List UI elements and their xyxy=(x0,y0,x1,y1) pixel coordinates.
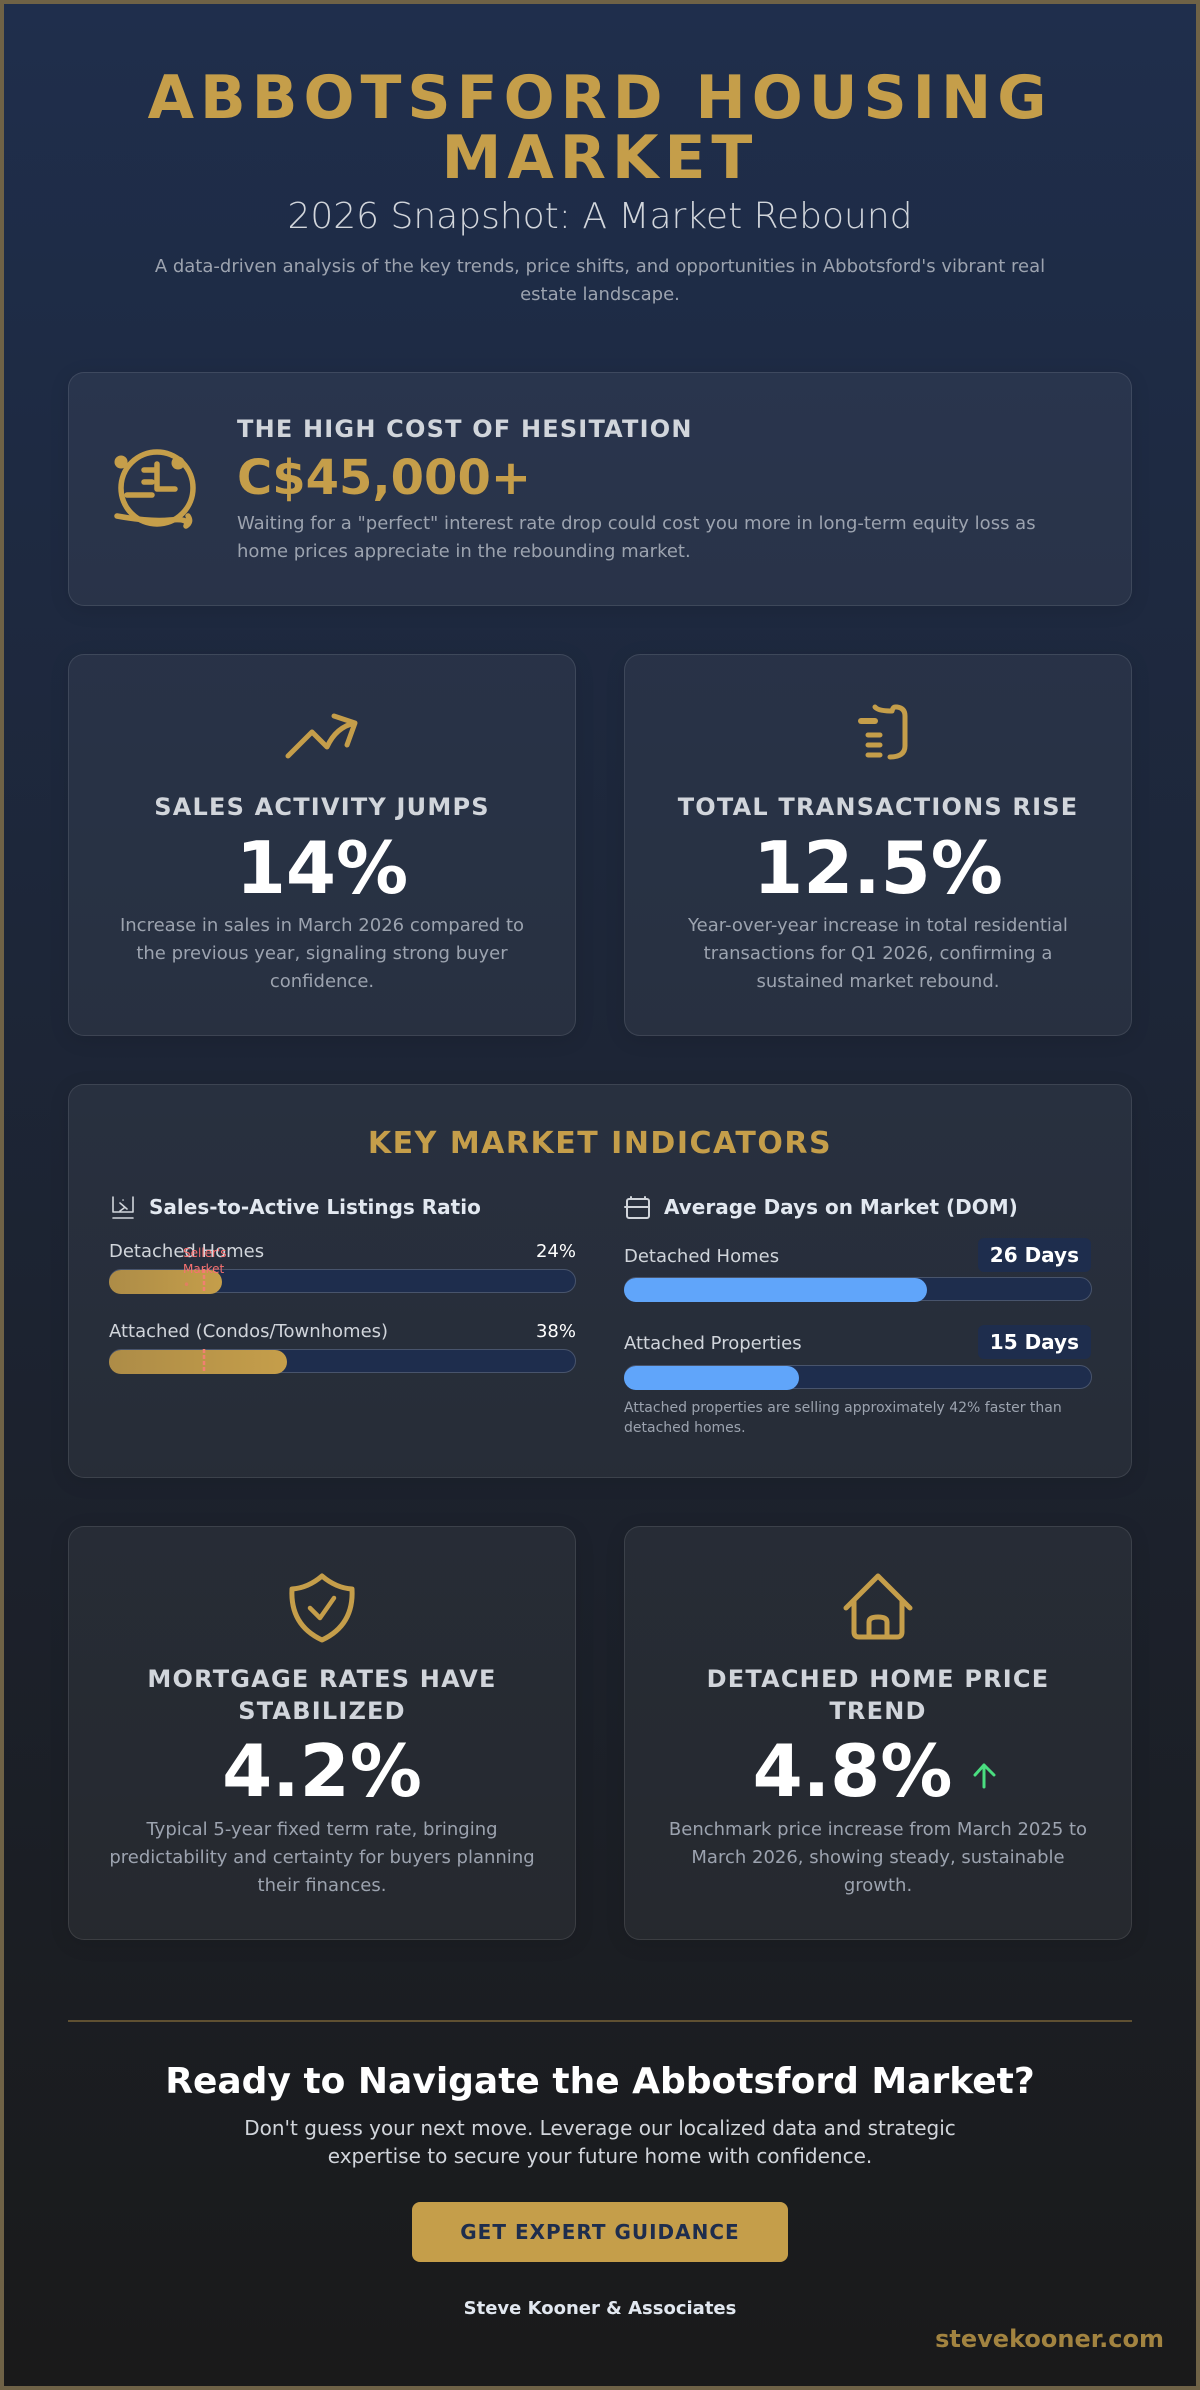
footnote: detached homes. xyxy=(624,1420,746,1436)
panel: key market indicators xyxy=(68,1084,1132,1478)
row: detached homes xyxy=(109,1241,576,1294)
description xyxy=(120,915,524,992)
chart: sales-to-active listings ratio xyxy=(109,1195,576,1374)
cta button xyxy=(412,2202,788,2262)
panel title: KEY MARKET INDICATORS xyxy=(368,1126,832,1161)
card title: TREND xyxy=(829,1697,927,1725)
icon: chart xyxy=(113,1197,133,1218)
hero label: THE HIGH COST OF HESITATION xyxy=(237,415,693,443)
description xyxy=(669,1819,1087,1896)
company name: Steve Kooner & Associates xyxy=(464,2298,736,2319)
icon: trend arrow xyxy=(288,716,355,756)
description: transactions for Q1 2026, confirming a xyxy=(704,943,1052,964)
marker label: • xyxy=(183,1278,190,1292)
hero description xyxy=(237,513,1036,562)
card title: SALES ACTIVITY JUMPS xyxy=(154,793,490,821)
panel: mortgage rates xyxy=(68,1526,576,1940)
icon: shield xyxy=(292,1576,352,1640)
intro text xyxy=(155,256,1045,305)
marker label xyxy=(183,1246,227,1292)
icon: clipboard xyxy=(861,707,905,757)
row: detached days xyxy=(624,1238,1092,1302)
card title: TOTAL TRANSACTIONS RISE xyxy=(678,793,1078,821)
card title: STABILIZED xyxy=(238,1697,406,1725)
marker label: Market xyxy=(183,1262,225,1276)
row: detached days: 26 Days xyxy=(990,1243,1079,1267)
row: attached homes xyxy=(109,1321,576,1374)
description: Increase in sales in March 2026 compared to xyxy=(120,915,524,936)
icon: house xyxy=(846,1576,910,1637)
hero value: C$45,000+ xyxy=(237,450,531,506)
panel: total transactions xyxy=(624,654,1132,1036)
chart: average days on market xyxy=(624,1195,1092,1436)
description: March 2026, showing steady, sustainable xyxy=(691,1847,1065,1868)
row: detached homes: Detached Homes xyxy=(109,1241,264,1262)
row: detached homes: 24% xyxy=(536,1241,576,1262)
row: attached homes: Attached (Condos/Townhomes) xyxy=(109,1321,388,1342)
description xyxy=(687,915,1068,992)
description: Benchmark price increase from March 2025 to xyxy=(669,1819,1087,1840)
hero description: home prices appreciate in the rebounding market. xyxy=(237,541,691,562)
description: Typical 5-year fixed term rate, bringing xyxy=(145,1819,498,1840)
row: attached days: Attached Properties xyxy=(624,1333,802,1354)
call to action xyxy=(68,2020,1164,2353)
intro text: A data-driven analysis of the key trends, price shifts, and opportunities in Abbotsford's vibrant real xyxy=(155,256,1045,277)
stat value: 4.2% xyxy=(222,1729,422,1813)
cta heading: Ready to Navigate the Abbotsford Market? xyxy=(165,2061,1035,2102)
row: attached days xyxy=(624,1325,1092,1390)
icon: calendar xyxy=(625,1197,649,1218)
cta text xyxy=(244,2116,956,2168)
stat value: 12.5% xyxy=(753,826,1003,910)
title: MARKET xyxy=(442,123,758,193)
footnote xyxy=(624,1400,1062,1436)
hero description: Waiting for a "perfect" interest rate drop could cost you more in long-term equity loss as xyxy=(237,513,1036,534)
card title xyxy=(147,1665,497,1725)
cta button: GET EXPERT GUIDANCE xyxy=(460,2220,740,2244)
icon: up arrow xyxy=(975,1765,994,1787)
title: ABBOTSFORD HOUSING xyxy=(148,63,1052,133)
description: their finances. xyxy=(258,1875,386,1896)
row: detached days: Detached Homes xyxy=(624,1246,779,1267)
header xyxy=(148,63,1052,305)
title xyxy=(148,63,1052,193)
cta text: expertise to secure your future home with confidence. xyxy=(328,2144,872,2168)
cta text: Don't guess your next move. Leverage our localized data and strategic xyxy=(244,2116,956,2140)
intro text: estate landscape. xyxy=(520,284,680,305)
description: confidence. xyxy=(270,971,374,992)
description: sustained market rebound. xyxy=(757,971,999,992)
marker label: Seller's xyxy=(183,1246,227,1260)
description: the previous year, signaling strong buyer xyxy=(136,943,508,964)
panel: sales activity xyxy=(68,654,576,1036)
row: attached homes: 38% xyxy=(536,1321,576,1342)
subtitle: 2026 Snapshot: A Market Rebound xyxy=(287,196,913,237)
row: attached days: 15 Days xyxy=(990,1330,1079,1354)
footnote: Attached properties are selling approximately 42% faster than xyxy=(624,1400,1062,1416)
stat value: 4.8% xyxy=(753,1729,952,1813)
website: stevekooner.com xyxy=(935,2325,1164,2353)
card title: DETACHED HOME PRICE xyxy=(707,1665,1049,1693)
panel: detached home price xyxy=(624,1526,1132,1940)
description: Year-over-year increase in total residential xyxy=(687,915,1068,936)
card title: MORTGAGE RATES HAVE xyxy=(147,1665,497,1693)
description xyxy=(109,1819,535,1896)
stat value: 14% xyxy=(236,826,408,910)
card title xyxy=(707,1665,1049,1725)
description: growth. xyxy=(844,1875,912,1896)
chart heading: Sales-to-Active Listings Ratio xyxy=(149,1195,481,1219)
icon: clock with coin xyxy=(117,452,193,526)
panel: cost of hesitation xyxy=(68,372,1132,606)
description: predictability and certainty for buyers planning xyxy=(109,1847,535,1868)
chart heading: Average Days on Market (DOM) xyxy=(664,1195,1018,1219)
